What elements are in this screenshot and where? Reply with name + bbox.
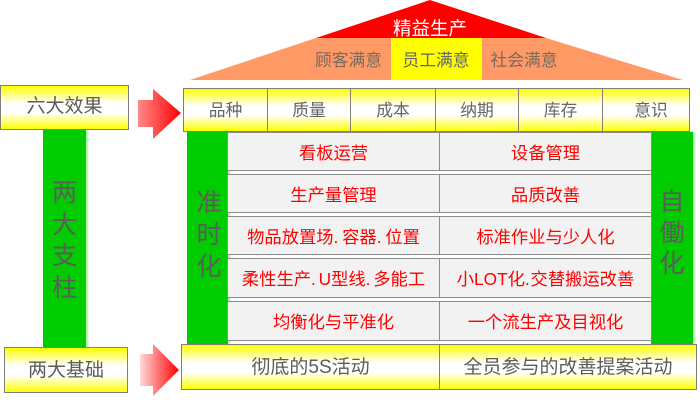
- effect: variety: 品种: [209, 101, 242, 120]
- effect: quality: [268, 89, 351, 131]
- cell: standard work: 标准作业与少人化: [476, 227, 615, 247]
- pillar: autonomation: 化: [659, 250, 684, 278]
- effect: inventory: [519, 89, 603, 131]
- cell: kanban: 看板运营: [299, 143, 368, 163]
- left pillar: two pillars: 柱: [52, 274, 77, 302]
- effect: quality: 质量: [292, 101, 326, 120]
- effect: cost: 成本: [376, 101, 410, 120]
- cell: one piece flow: [439, 301, 652, 341]
- pillar: autonomation: 自: [659, 188, 684, 216]
- foundation: 5S: [181, 344, 440, 390]
- cell: quality improvement: [439, 174, 652, 213]
- cell: storage: 物品放置场. 容器. 位置: [247, 227, 420, 247]
- cell: storage: [227, 216, 440, 255]
- six effects row: [183, 88, 690, 132]
- left label: two foundations: 两大基础: [28, 360, 104, 381]
- roof: lean production house: 员工满意: [402, 51, 470, 70]
- left pillar: two pillars: [43, 130, 86, 347]
- cell: small lot: 小LOT化. 交替搬运改善: [457, 269, 634, 289]
- pillar: just in time: 准: [196, 189, 222, 217]
- roof: lean production house: 精益生产: [393, 18, 467, 39]
- foundation: 5S: 彻底的5S活动: [251, 357, 370, 378]
- effect: variety: [184, 89, 268, 131]
- cell: equipment: 设备管理: [511, 143, 580, 163]
- effect: awareness: 意识: [634, 101, 668, 120]
- roof: lean production house: 社会满意: [490, 51, 558, 70]
- left label: six effects: 六大效果: [26, 96, 102, 117]
- cell: leveling: [227, 301, 440, 341]
- cell: production volume: 生产量管理: [290, 185, 377, 205]
- pillar: just in time: 化: [196, 253, 222, 281]
- left pillar: two pillars: 支: [52, 242, 77, 270]
- left label: six effects: [0, 85, 129, 130]
- cell: flexible production: [227, 258, 440, 298]
- cell: equipment: [439, 132, 652, 171]
- cell: standard work: [439, 216, 652, 255]
- effect: cost: [351, 89, 436, 131]
- left label: two foundations: [4, 347, 128, 393]
- cell: leveling: 均衡化与平准化: [273, 312, 394, 332]
- left pillar: two pillars: 两: [52, 179, 77, 207]
- pillar: autonomation: 働: [659, 219, 684, 247]
- cell: flexible production: 柔性生产. U型线. 多能工: [242, 269, 425, 289]
- left pillar: two pillars: 大: [52, 210, 77, 238]
- pillar: just in time: [187, 132, 228, 344]
- roof: lean production house: 顾客满意: [315, 51, 382, 70]
- foundation: kaizen: [439, 344, 697, 390]
- cell: production volume: [227, 174, 440, 213]
- effect: delivery: 纳期: [460, 101, 494, 120]
- effect: delivery: [436, 89, 519, 131]
- pillar: just in time: 时: [196, 221, 222, 249]
- cell: kanban: [227, 132, 440, 171]
- foundation: kaizen: 全员参与的改善提案活动: [463, 357, 672, 378]
- effect: inventory: 库存: [544, 101, 577, 120]
- cell: one piece flow: 一个流生产及目视化: [468, 312, 623, 332]
- pillar: autonomation: [651, 132, 693, 344]
- cell: small lot: [439, 258, 652, 298]
- cell: quality improvement: 品质改善: [511, 185, 580, 205]
